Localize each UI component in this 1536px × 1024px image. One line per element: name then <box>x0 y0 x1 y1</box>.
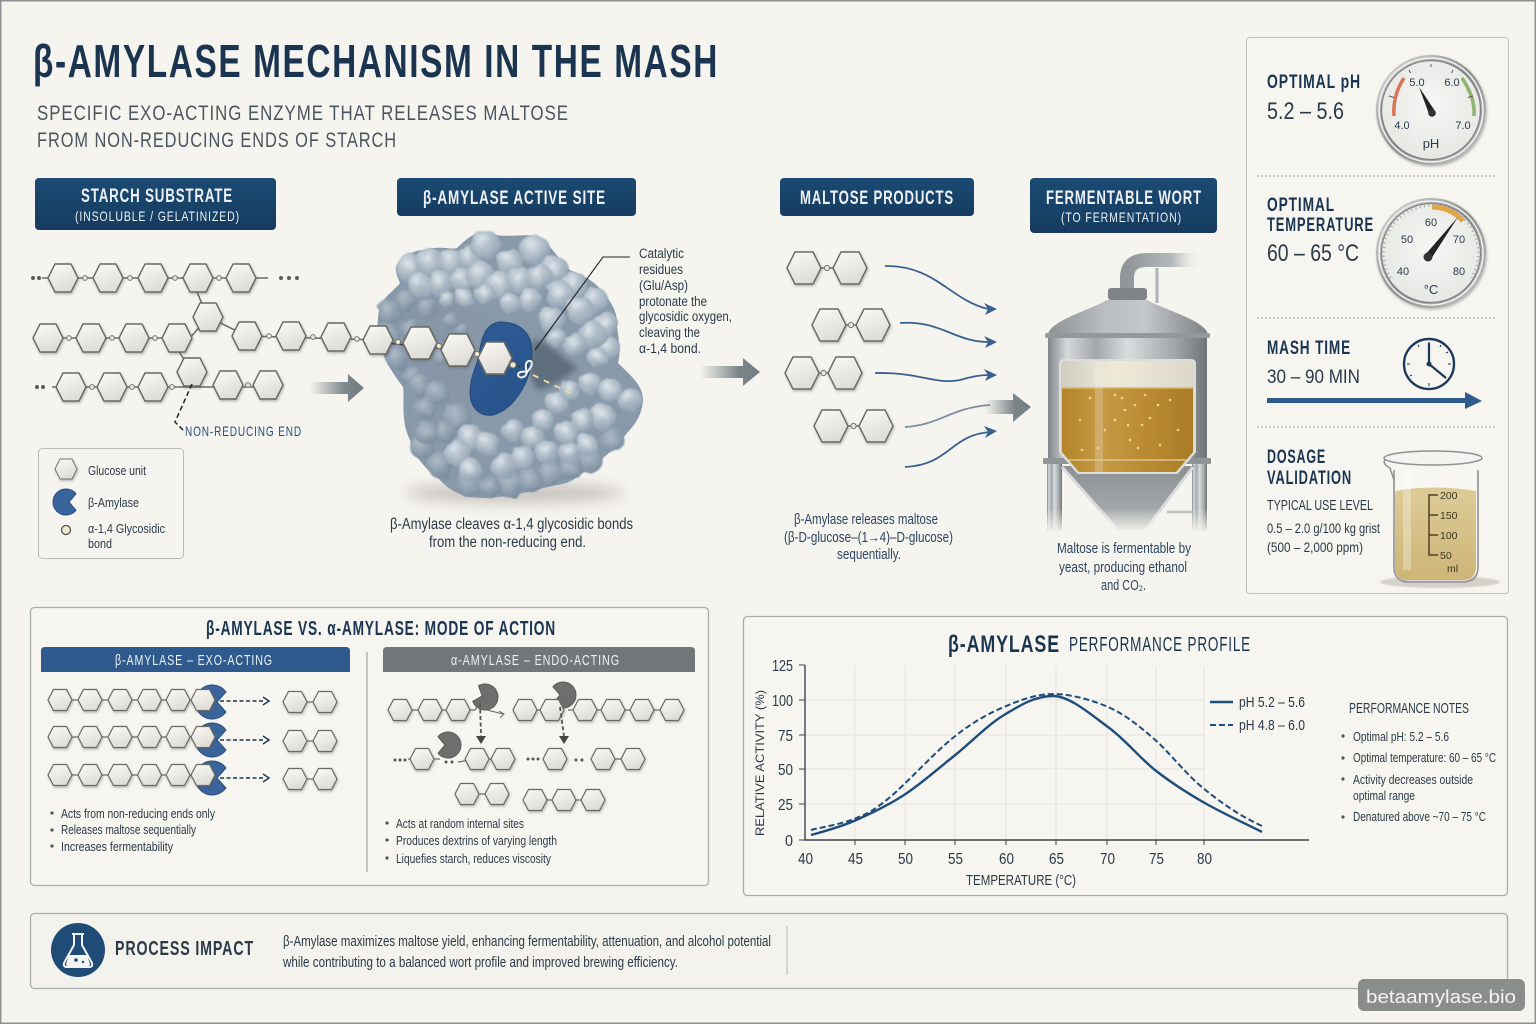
arrow: substrate to enzyme <box>310 374 364 402</box>
caption: wort: and CO₂. <box>1101 578 1146 594</box>
line chart: 50 <box>778 762 793 779</box>
header: alpha-amylase <box>383 647 695 672</box>
icon: beaker: 200 <box>1440 490 1458 502</box>
legend: Glucose unit <box>88 463 146 478</box>
gauge: temperature: °C <box>1424 282 1438 297</box>
line chart: 100 <box>772 693 793 710</box>
line chart: 40 <box>798 851 813 868</box>
gauge: temperature: 40 <box>1397 266 1409 278</box>
gauge: pH: 6.0 <box>1444 77 1460 89</box>
icon: glycosidic bond <box>62 526 70 534</box>
legend: α-1,4 Glycosidic <box>88 521 165 536</box>
heading: performance: β-AMYLASE <box>948 631 1060 658</box>
heading: process impact: PROCESS IMPACT <box>115 938 254 960</box>
panel: mode of action comparison <box>30 608 708 886</box>
label: non-reducing end: NON-REDUCING END <box>185 423 302 439</box>
icon: beaker: 100 <box>1440 530 1458 542</box>
chart legend: pH 4.8 – 6.0 <box>1239 717 1305 734</box>
caption: wort: yeast, producing ethanol <box>1059 560 1187 576</box>
enzyme rim lobes <box>376 289 624 498</box>
heading: fermentable wort: (TO FERMENTATION) <box>1061 209 1182 225</box>
callout: catalytic residues: α-1,4 bond. <box>639 341 701 356</box>
legend: β-Amylase <box>88 495 139 510</box>
diagram: endo-acting <box>388 681 684 810</box>
bullets: endo-acting: Produces dextrins of varying length <box>396 833 557 848</box>
line chart: 80 <box>1197 851 1212 868</box>
line chart: 25 <box>778 797 793 814</box>
bullets: endo-acting: Acts at random internal sites <box>396 816 524 831</box>
legend <box>38 448 184 558</box>
heading: comparison: β-AMYLASE VS. α-AMYLASE: MODE OF ACTION <box>206 618 556 640</box>
line chart: 65 <box>1049 851 1064 868</box>
line chart <box>753 658 1309 889</box>
line chart: TEMPERATURE (°C) <box>966 872 1076 889</box>
heading: maltose products: MALTOSE PRODUCTS <box>800 188 954 209</box>
callout: catalytic residues: protonate the <box>639 294 707 309</box>
text: process impact: while contributing to a balanced wort profile and improved brewing efficiency. <box>282 955 678 971</box>
line chart: 60 <box>999 851 1014 868</box>
header: alpha-amylase: α-AMYLASE – ENDO-ACTING <box>451 653 620 669</box>
caption: wort: Maltose is fermentable by <box>1057 541 1192 557</box>
performance notes: Activity decreases outside <box>1353 772 1473 787</box>
label: non-reducing end <box>175 384 302 439</box>
heading: starch substrate <box>35 178 276 230</box>
performance notes: Denatured above ~70 – 75 °C <box>1353 809 1486 824</box>
caption: maltose: sequentially. <box>837 547 901 563</box>
subtitle <box>37 102 569 152</box>
arrows: maltose to wort <box>875 266 997 467</box>
text: optimal temperature: 60 – 65 °C <box>1267 240 1359 267</box>
gauge: pH: 5.0 <box>1409 77 1425 89</box>
heading: active site <box>397 178 636 216</box>
watermark <box>1358 979 1525 1011</box>
legend: bond <box>88 536 112 551</box>
gauge: pH: pH <box>1423 136 1439 151</box>
heading: performance: PERFORMANCE PROFILE <box>1069 634 1251 656</box>
caption: wort <box>1057 541 1192 594</box>
bullets: exo-acting: Releases maltose sequentially <box>61 822 196 837</box>
caption: enzyme: from the non-reducing end. <box>429 534 586 551</box>
callout: catalytic residues <box>535 246 732 356</box>
gauge: pH: 7.0 <box>1455 120 1471 132</box>
performance notes: Optimal pH: 5.2 – 5.6 <box>1353 729 1449 744</box>
text: optimal pH: OPTIMAL pH <box>1267 72 1361 93</box>
text: mash time <box>1267 338 1360 388</box>
enzyme illustration <box>363 230 643 503</box>
line chart: 70 <box>1100 851 1115 868</box>
caption: enzyme <box>390 516 633 551</box>
gauge: temperature: 50 <box>1401 234 1413 246</box>
text: mash time: 30 – 90 MIN <box>1267 367 1360 388</box>
bullets: exo-acting <box>50 806 215 854</box>
callout: catalytic residues: (Glu/Asp) <box>639 278 688 293</box>
gauge: pH: 4.0 <box>1394 120 1410 132</box>
arrow: mash time <box>1267 392 1482 409</box>
heading: fermentable wort: FERMENTABLE WORT <box>1046 188 1202 209</box>
caption: maltose <box>784 512 953 563</box>
text: process impact: β-Amylase maximizes maltose yield, enhancing fermentability, attenuation, and alcohol potential <box>283 934 771 950</box>
heading: starch substrate: STARCH SUBSTRATE <box>81 186 233 207</box>
icon: bond loop <box>518 361 532 377</box>
maltose molecules <box>785 252 893 442</box>
line chart: 75 <box>1149 851 1164 868</box>
line chart: 45 <box>848 851 863 868</box>
text: dosage: (500 – 2,000 ppm) <box>1267 539 1363 555</box>
enzyme lower lobes <box>409 374 470 445</box>
heading: fermentable wort <box>1030 178 1217 233</box>
line chart: 55 <box>948 851 963 868</box>
icon: beaker <box>1380 451 1500 588</box>
watermark: betaamylase.bio <box>1366 987 1516 1007</box>
caption: maltose: β-Amylase releases maltose <box>794 512 938 528</box>
text: dosage: TYPICAL USE LEVEL <box>1267 498 1373 514</box>
gauge: temperature: 60 <box>1425 217 1437 229</box>
gauge: temperature <box>1376 198 1486 308</box>
performance notes: optimal range <box>1353 788 1415 803</box>
heading: active site: β-AMYLASE ACTIVE SITE <box>423 188 606 209</box>
bullets: exo-acting: Increases fermentability <box>61 839 173 854</box>
bullets: endo-acting: Liquefies starch, reduces viscosity <box>396 851 551 866</box>
gauge: pH <box>1376 55 1486 165</box>
gauge: temperature: 70 <box>1453 234 1465 246</box>
starch chains <box>31 264 378 401</box>
text: dosage: DOSAGE <box>1267 447 1326 468</box>
fermenter tank <box>1040 260 1215 534</box>
header: beta-amylase: β-AMYLASE – EXO-ACTING <box>115 653 273 669</box>
header: beta-amylase <box>41 647 350 672</box>
icon: beaker: 150 <box>1440 510 1458 522</box>
callout: catalytic residues: glycosidic oxygen, <box>639 309 732 324</box>
chart legend: pH 5.2 – 5.6 <box>1239 694 1305 711</box>
subtitle: SPECIFIC EXO-ACTING ENZYME THAT RELEASES MALTOSE <box>37 102 569 125</box>
text: mash time: MASH TIME <box>1267 338 1351 359</box>
icon: beta-amylase <box>53 489 76 515</box>
caption: enzyme: β-Amylase cleaves α-1,4 glycosidic bonds <box>390 516 633 533</box>
diagram: exo-acting <box>48 685 337 795</box>
callout: catalytic residues: residues <box>639 262 683 277</box>
icon: glucose unit <box>55 459 77 479</box>
callout: catalytic residues: cleaving the <box>639 325 700 340</box>
line chart: 75 <box>778 728 793 745</box>
icon: clock <box>1404 339 1454 389</box>
heading: maltose products <box>780 178 974 216</box>
line chart: RELATIVE ACTIVITY (%) <box>753 690 767 836</box>
line chart: 50 <box>898 851 913 868</box>
text: dosage <box>1267 447 1380 555</box>
icon: beaker: 50 <box>1440 550 1452 562</box>
title: β-AMYLASE MECHANISM IN THE MASH <box>33 35 719 87</box>
text: optimal pH <box>1267 72 1361 125</box>
caption: maltose: (β-D-glucose–(1→4)–D-glucose) <box>784 530 953 546</box>
enzyme upper lobes <box>396 230 620 368</box>
performance notes <box>1341 701 1496 824</box>
panel: process parameters <box>1246 38 1508 594</box>
enzyme left hollow shading <box>400 298 490 420</box>
performance notes: PERFORMANCE NOTES <box>1349 701 1469 717</box>
callout: catalytic residues: Catalytic <box>639 246 684 261</box>
text: process impact <box>282 934 771 971</box>
gauge: temperature: 80 <box>1453 266 1465 278</box>
icon: flask <box>51 923 105 977</box>
text: optimal temperature <box>1267 195 1374 267</box>
enzyme active site blue domain <box>470 322 532 415</box>
performance notes: Optimal temperature: 60 – 65 °C <box>1353 750 1496 765</box>
arrow: enzyme to maltose <box>700 358 760 386</box>
line chart: 0 <box>785 833 793 850</box>
panel: performance profile <box>744 616 1508 896</box>
text: optimal temperature: TEMPERATURE <box>1267 215 1374 236</box>
enzyme dark slot <box>529 340 578 390</box>
text: optimal pH: 5.2 – 5.6 <box>1267 98 1344 125</box>
bullets: endo-acting <box>385 816 557 866</box>
text: dosage: VALIDATION <box>1267 468 1352 489</box>
heading: starch substrate: (INSOLUBLE / GELATINIZED) <box>75 208 240 224</box>
panel: process impact <box>30 914 1508 988</box>
text: dosage: 0.5 – 2.0 g/100 kg grist <box>1267 520 1380 536</box>
arrow: to fermenter <box>985 393 1031 422</box>
chart legend <box>1210 694 1305 734</box>
heading: performance <box>948 631 1251 658</box>
subtitle: FROM NON-REDUCING ENDS OF STARCH <box>37 129 397 152</box>
line chart: 125 <box>772 658 793 675</box>
bullets: exo-acting: Acts from non-reducing ends only <box>61 806 215 821</box>
text: optimal temperature: OPTIMAL <box>1267 195 1335 216</box>
icon: beaker: ml <box>1447 563 1458 575</box>
